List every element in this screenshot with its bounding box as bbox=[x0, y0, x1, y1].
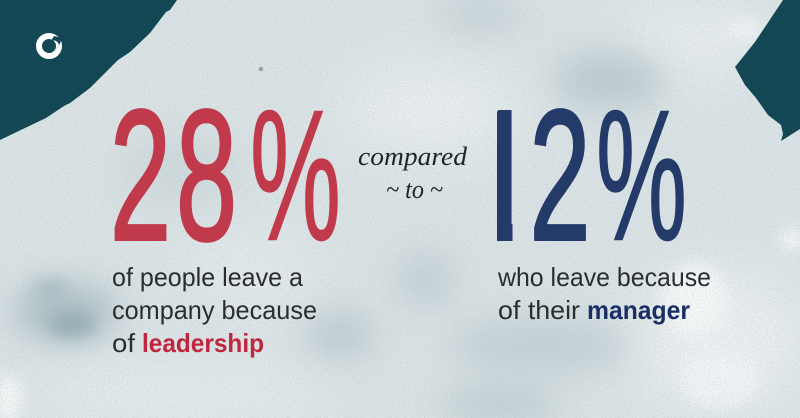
stat: 28 percent: 2 bbox=[110, 73, 171, 280]
caption: manager: manager bbox=[587, 295, 690, 325]
stat: 12 percent: 2 bbox=[530, 73, 591, 280]
connector: compared to bbox=[358, 142, 468, 204]
stat: 12 percent bbox=[497, 108, 684, 242]
stat: 12 percent: 1 bbox=[463, 71, 541, 279]
logo mark bbox=[39, 36, 62, 56]
caption: leadership: of people leave a bbox=[112, 262, 304, 292]
stat: 28 percent: 8 bbox=[176, 73, 237, 280]
connector: compared to: ~ to ~ bbox=[386, 175, 443, 204]
stat: 28 percent: % bbox=[250, 71, 341, 279]
caption: manager: of their bbox=[498, 295, 580, 325]
stat: 12 percent: % bbox=[596, 71, 687, 279]
caption: leadership: of bbox=[112, 328, 136, 358]
connector: compared to: compared bbox=[358, 142, 468, 171]
caption: manager bbox=[497, 262, 711, 325]
caption: leadership: leadership bbox=[142, 328, 264, 358]
caption: leadership bbox=[112, 262, 317, 358]
caption: leadership: company because bbox=[112, 295, 317, 325]
corner shape: top right teal wash bbox=[735, 0, 800, 141]
caption: manager: who leave because bbox=[497, 262, 711, 292]
stat: 28 percent bbox=[110, 71, 341, 280]
corner shape: top left teal wash bbox=[0, 0, 177, 140]
